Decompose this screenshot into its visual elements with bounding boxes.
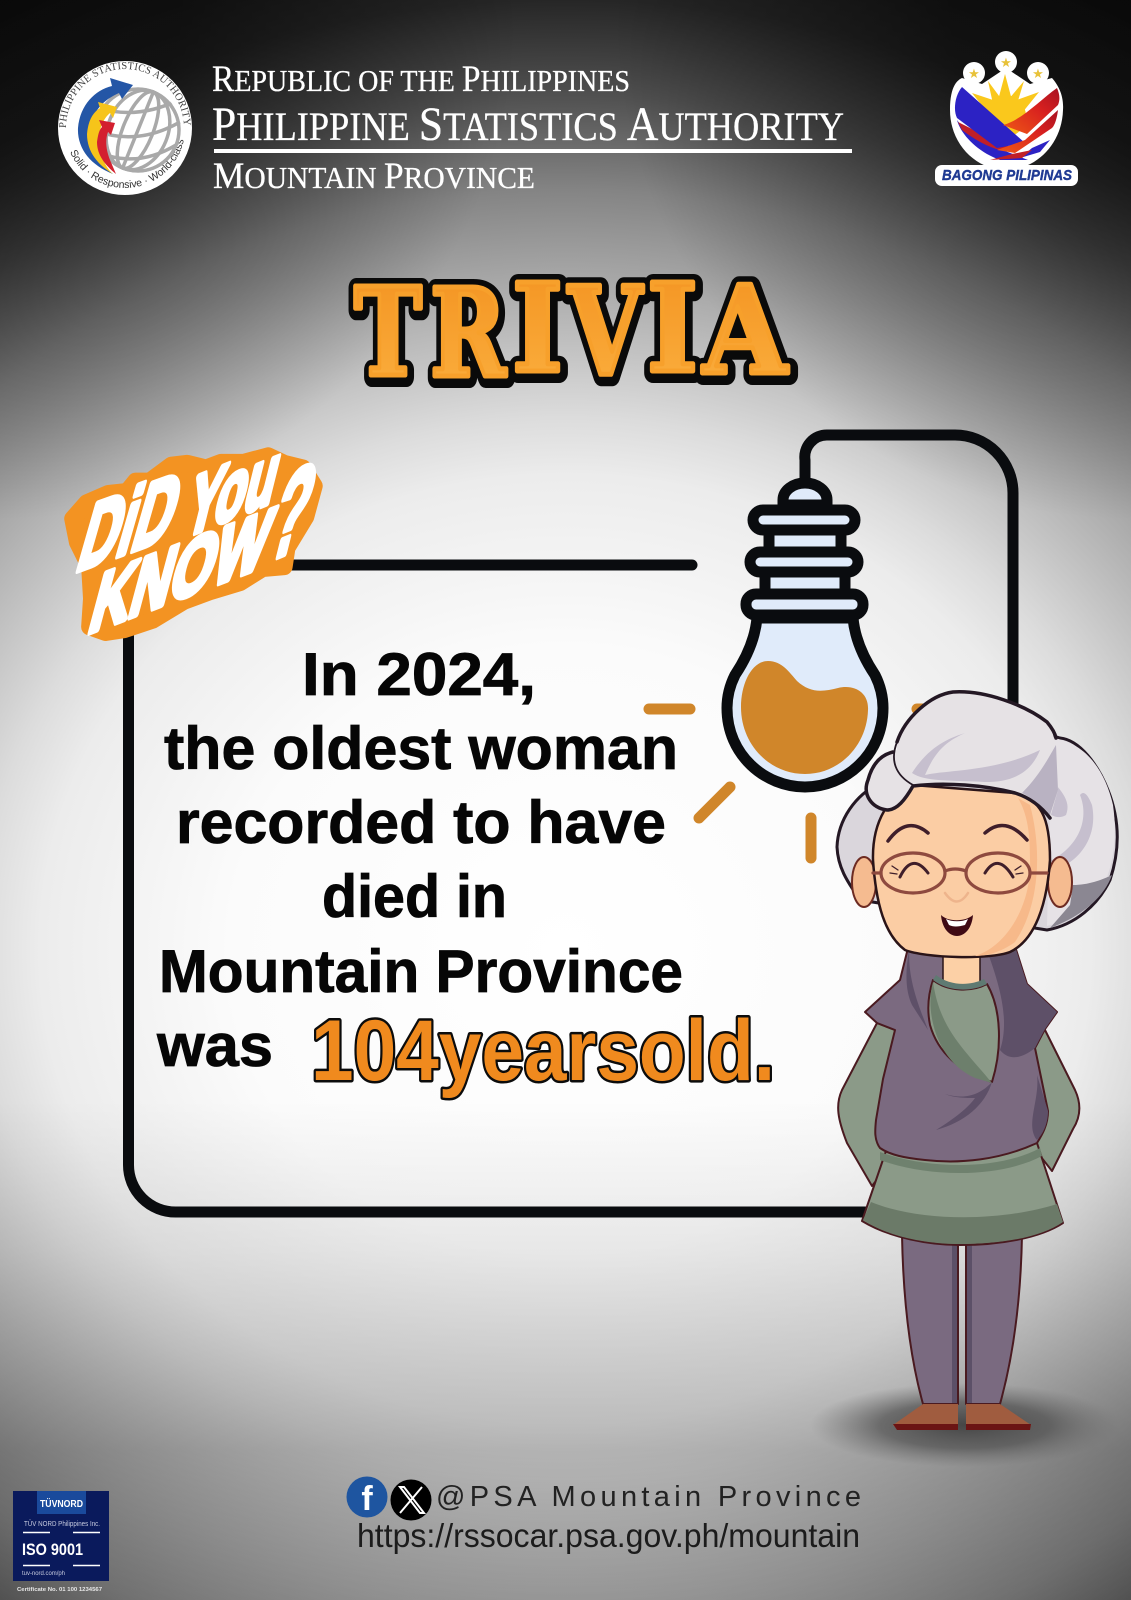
header: Republic of the Philippines: REPUBLIC OF THE PHILIPPINES xyxy=(212,59,630,100)
PSA logo xyxy=(58,61,192,195)
badge: Did You Know: ? xyxy=(258,435,328,590)
main text xyxy=(156,641,683,1079)
badge: TUV NORD ISO 9001: TÜVNORD xyxy=(40,1497,83,1510)
title: TRIVIA xyxy=(354,256,790,407)
badge: Did You Know: KNOW xyxy=(81,490,282,653)
PSA logo: PHILIPPINE STATISTICS AUTHORITY xyxy=(59,62,191,128)
icon: Facebook: f xyxy=(361,1480,373,1518)
badge: Did You Know: You xyxy=(177,422,291,557)
face xyxy=(873,785,1050,957)
title: TRIVIA: I xyxy=(513,258,564,402)
main text: died in xyxy=(322,863,507,930)
icon: light bulb xyxy=(727,483,883,787)
Bagong Pilipinas logo: BAGONG PILIPINAS xyxy=(942,168,1072,184)
badge: Did You Know: DiD xyxy=(68,450,193,593)
Bagong Pilipinas logo: ★ xyxy=(1032,66,1044,81)
Bagong Pilipinas logo xyxy=(935,51,1078,186)
badge: TUV NORD ISO 9001 xyxy=(13,1491,109,1593)
header rule xyxy=(214,149,852,153)
nose xyxy=(945,893,968,902)
title: TRIVIA: I xyxy=(512,256,563,400)
main text: recorded to have xyxy=(176,789,666,856)
mouth xyxy=(941,915,973,936)
header: Philippine Statistics Authority: PHILIPPINE STATISTICS AUTHORITY xyxy=(212,98,844,151)
main text: was xyxy=(156,1012,273,1079)
character: smiling grandmother xyxy=(837,692,1117,1430)
website URL: https://rssocar.psa.gov.ph/mountain xyxy=(357,1517,860,1554)
title: TRIVIA: R xyxy=(430,261,507,405)
title: TRIVIA: I xyxy=(647,256,698,400)
panel frame: text box outline xyxy=(128,435,1013,1212)
title: TRIVIA: A xyxy=(702,258,789,402)
highlighted number: 104 years old: 104yearsold. xyxy=(311,1003,775,1099)
ears xyxy=(852,857,1072,907)
Bagong Pilipinas logo: ★ xyxy=(968,66,980,81)
hair right swirl xyxy=(1044,738,1115,928)
icon: X xyxy=(390,1480,432,1520)
neck xyxy=(943,945,980,990)
glasses xyxy=(873,853,1047,893)
arms xyxy=(838,1023,1079,1186)
badge: TUV NORD ISO 9001: Certificate No. 01 100 1234567 xyxy=(17,1587,102,1593)
Bagong Pilipinas logo: ★ xyxy=(1000,55,1012,70)
badge: TUV NORD ISO 9001: TÜV NORD Philippines Inc. xyxy=(24,1520,100,1528)
title: TRIVIA: T xyxy=(354,260,422,404)
floor shadow xyxy=(810,1383,1120,1467)
main text: Mountain Province xyxy=(159,938,683,1005)
shawl xyxy=(865,940,1057,1161)
inner tunic xyxy=(928,975,999,1130)
main text: the oldest woman xyxy=(164,715,678,782)
light rays xyxy=(649,709,945,858)
eyes xyxy=(890,863,1023,877)
skirt xyxy=(862,1143,1063,1245)
hair back xyxy=(837,720,1117,930)
title: TRIVIA: V xyxy=(567,259,644,403)
header: Mountain Province: MOUNTAIN PROVINCE xyxy=(213,156,535,197)
title: TRIVIA: R xyxy=(431,263,508,407)
title: TRIVIA: I xyxy=(648,258,699,402)
title: TRIVIA: T xyxy=(355,262,423,406)
title: TRIVIA: A xyxy=(703,260,790,404)
PSA logo: Solid · Responsive · World-class xyxy=(70,139,184,188)
icon: Facebook xyxy=(346,1476,388,1518)
shoes xyxy=(893,1404,1031,1430)
social handle: @PSA Mountain Province xyxy=(436,1481,861,1513)
title: TRIVIA: V xyxy=(568,261,645,405)
main text: In 2024, xyxy=(302,641,536,708)
legs xyxy=(902,1235,1022,1404)
icon: bulb glow fill xyxy=(741,661,868,774)
badge: TUV NORD ISO 9001: tuv-nord.com/ph xyxy=(22,1571,65,1577)
badge: TUV NORD ISO 9001: ISO 9001 xyxy=(22,1541,83,1559)
hair top xyxy=(866,692,1059,818)
eyebrows xyxy=(888,825,1027,841)
